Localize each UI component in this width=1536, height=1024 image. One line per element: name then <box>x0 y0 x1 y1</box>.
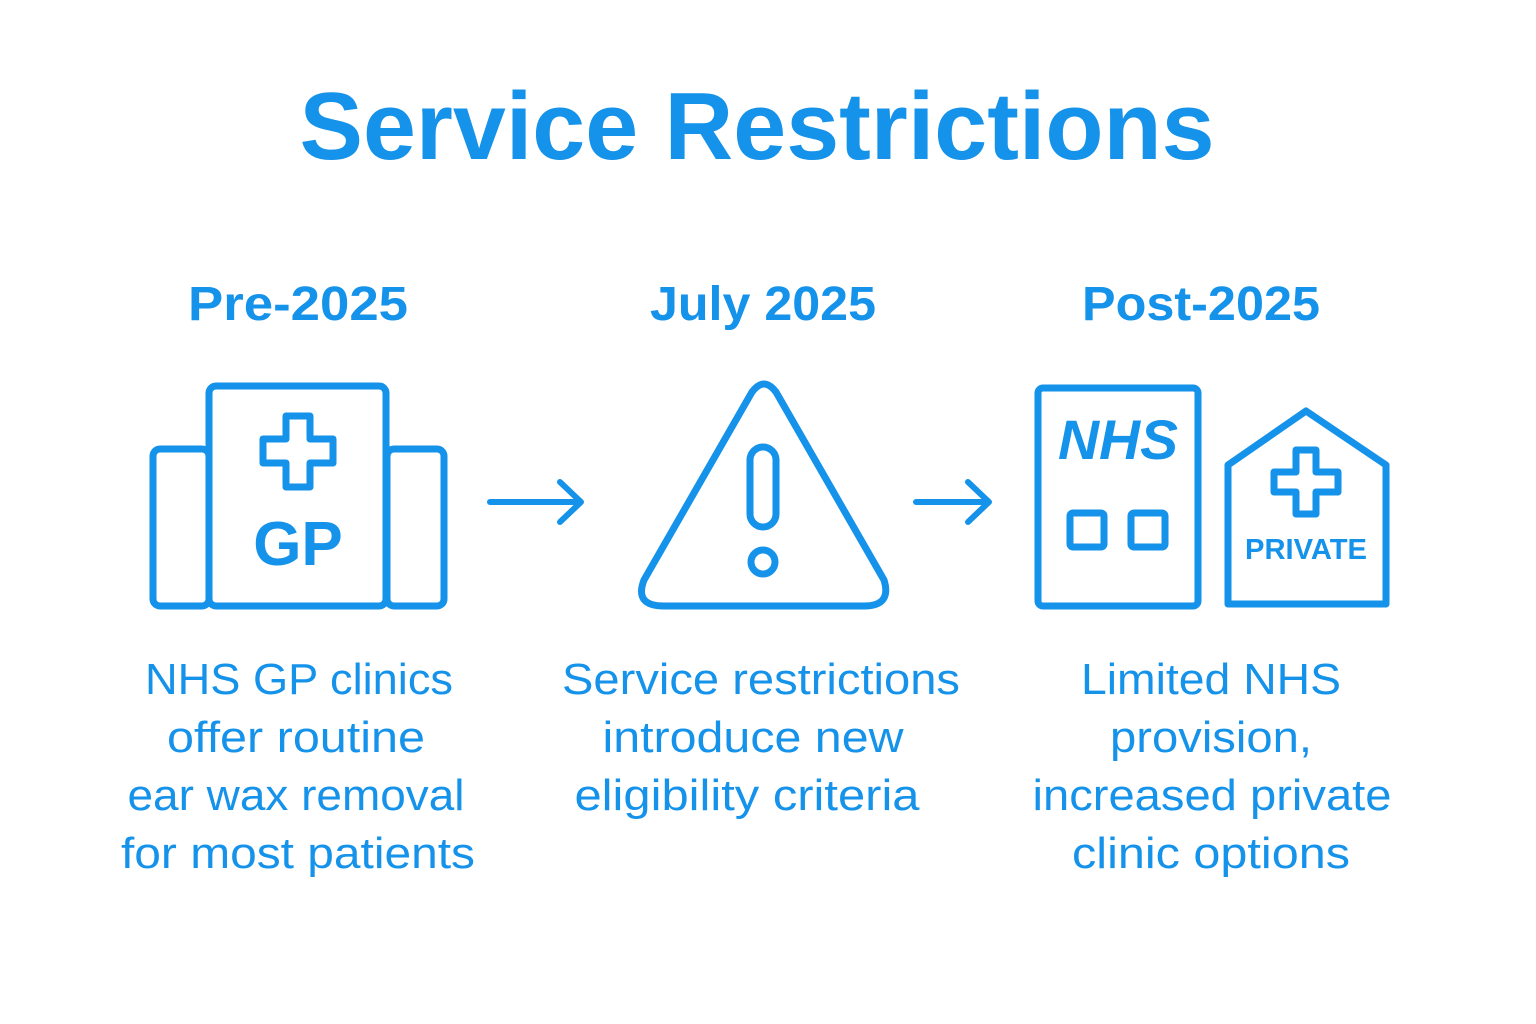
text block: pre-2025 description <box>121 655 475 878</box>
arrow 1 <box>490 482 581 522</box>
icon: NHS and private clinic <box>1038 388 1386 606</box>
text block: pre-2025 description: NHS GP clinics <box>145 655 453 704</box>
text block: post-2025 description: provision, <box>1110 713 1312 762</box>
icon: NHS and private clinic: NHS <box>1058 408 1178 471</box>
icon: GP clinic <box>153 386 444 606</box>
text block: pre-2025 description: offer routine <box>167 713 425 762</box>
arrow 2 <box>916 482 989 522</box>
heading: July 2025: July 2025 <box>650 278 876 331</box>
text block: pre-2025 description: for most patients <box>121 829 475 878</box>
text block: july 2025 description: introduce new <box>602 713 904 762</box>
text block: post-2025 description <box>1032 655 1392 878</box>
text block: post-2025 description: Limited NHS <box>1081 655 1341 704</box>
text block: july 2025 description: eligibility criteria <box>574 771 920 820</box>
icon: GP clinic: GP <box>253 510 343 579</box>
text block: pre-2025 description: ear wax removal <box>128 771 464 820</box>
text block: post-2025 description: clinic options <box>1072 829 1350 878</box>
heading: Post-2025: Post-2025 <box>1082 278 1320 331</box>
text block: post-2025 description: increased private <box>1032 771 1392 820</box>
heading: Pre-2025: Pre-2025 <box>188 278 408 331</box>
icon: warning triangle <box>642 384 886 606</box>
icon: NHS and private clinic: PRIVATE <box>1245 534 1367 566</box>
title: Service Restrictions <box>300 73 1214 180</box>
text block: july 2025 description: Service restrictions <box>562 655 960 704</box>
text block: july 2025 description <box>562 655 960 820</box>
